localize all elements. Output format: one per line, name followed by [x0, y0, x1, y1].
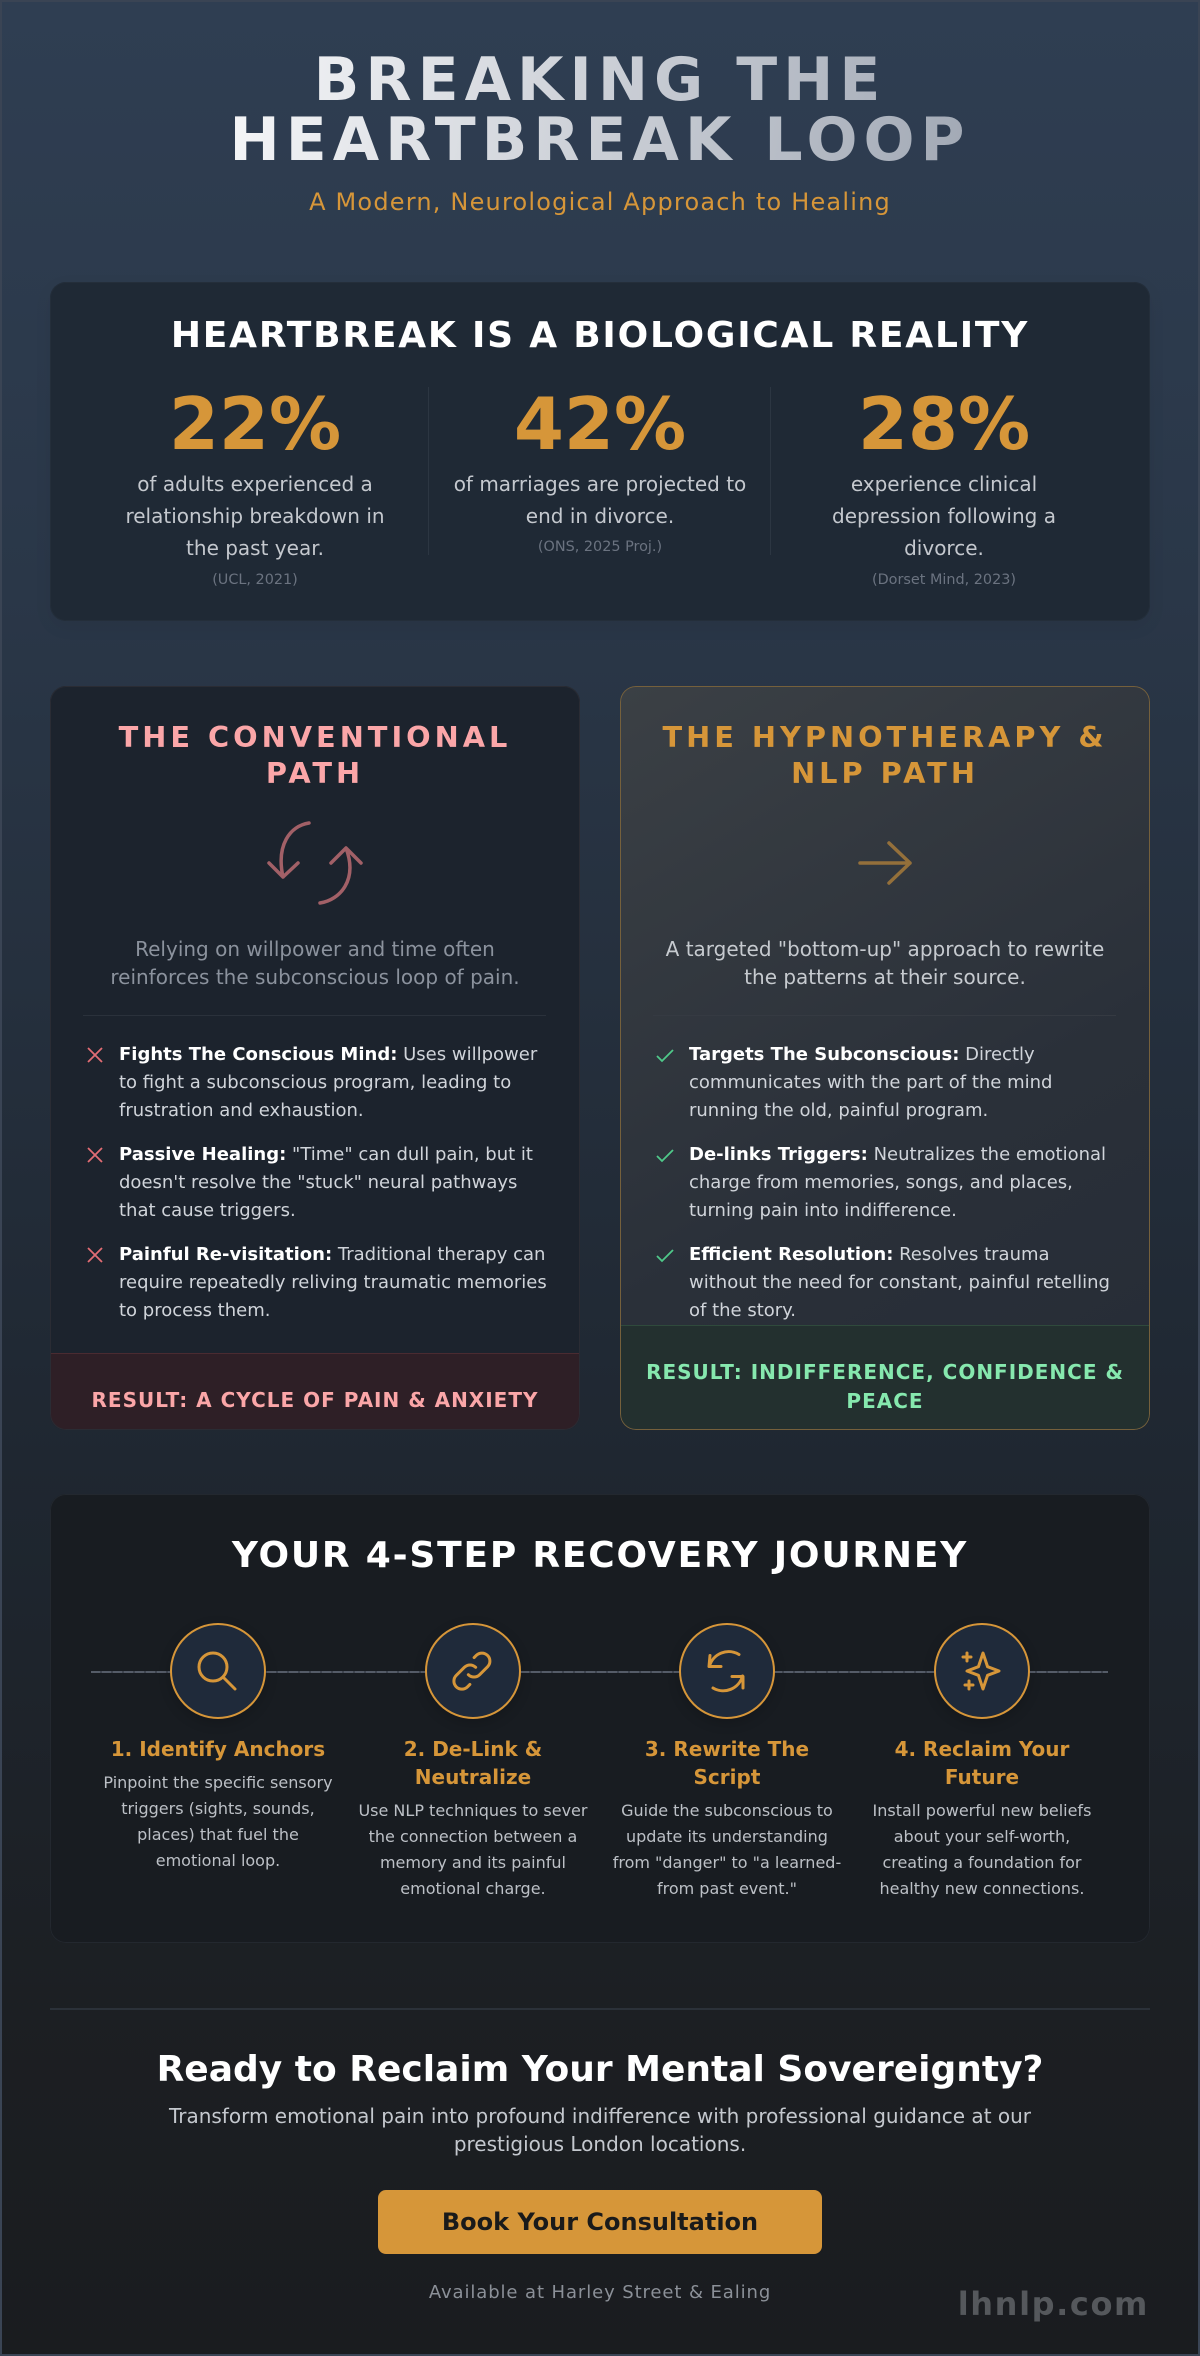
button: book consultation: [378, 2190, 822, 2254]
icon: sparkles: [934, 1623, 1030, 1719]
stat: 42%: 42%: [514, 382, 686, 466]
stat: 22%: relationship breakdown in: [125, 504, 385, 528]
list item: de-links triggers: charge from memories, songs, and places,: [689, 1172, 1073, 1192]
description: conventional: [110, 937, 520, 989]
step text 2: [358, 1801, 588, 1898]
step title 4: 4. Reclaim Your: [895, 1737, 1069, 1761]
list item: targets subconscious: [689, 1044, 1052, 1120]
list item: painful re-visitation: [119, 1244, 547, 1320]
step text 4: Install powerful new beliefs: [873, 1801, 1091, 1820]
heading: conventional path: [118, 720, 511, 790]
stat: 28%: (Dorset Mind, 2023): [872, 572, 1016, 588]
step text 3: update its understanding: [626, 1827, 828, 1846]
step text 3: [613, 1801, 841, 1898]
heading: hypnotherapy path: THE HYPNOTHERAPY &: [662, 720, 1108, 754]
title: [0, 50, 1200, 170]
title: HEARTBREAK LOOP: [230, 105, 970, 175]
step text 4: healthy new connections.: [880, 1879, 1084, 1898]
stat: 22%: [125, 382, 385, 588]
step title 2: [404, 1737, 542, 1789]
list item: efficient resolution: of the story.: [689, 1300, 796, 1320]
stat: 28%: 28%: [858, 382, 1030, 466]
stat: 42%: [454, 382, 746, 555]
list item: passive healing: doesn't resolve the "stuck" neural pathways: [119, 1172, 517, 1192]
stat: 22%: of adults experienced a: [137, 472, 373, 496]
list item: de-links triggers: turning pain into indifference.: [689, 1200, 957, 1220]
icon: chain link: [425, 1623, 521, 1719]
stat: 28%: experience clinical: [851, 472, 1037, 496]
step text 2: Use NLP techniques to sever: [358, 1801, 587, 1820]
stat: 22%: 22%: [169, 382, 341, 466]
result: indifference, confidence, peace: [620, 1325, 1150, 1430]
list item: painful re-visitation: to process them.: [119, 1300, 270, 1320]
step title 4: Future: [945, 1765, 1019, 1789]
heading: hypnotherapy path: NLP PATH: [791, 756, 979, 790]
icon: cycle arrows: [267, 821, 363, 905]
description: conventional: Relying on willpower and time often: [135, 937, 495, 961]
step text 2: memory and its painful: [380, 1853, 566, 1872]
list item: passive healing: [119, 1144, 533, 1220]
step text 4: about your self-worth,: [894, 1827, 1070, 1846]
step title 3: 3. Rewrite The: [645, 1737, 809, 1761]
stat: 28%: depression following a: [832, 504, 1056, 528]
step text 4: [873, 1801, 1091, 1898]
step text 3: from past event.": [657, 1879, 797, 1898]
step title 2: Neutralize: [415, 1765, 531, 1789]
list item: efficient resolution: without the need for constant, painful retelling: [689, 1272, 1110, 1292]
divider 1: [428, 387, 429, 555]
description: conventional: reinforces the subconscious loop of pain.: [110, 965, 520, 989]
icon: check 2: [656, 1149, 674, 1162]
step title 3: Script: [694, 1765, 760, 1789]
heading: recovery journey: YOUR 4-STEP RECOVERY JOURNEY: [232, 1535, 968, 1576]
step text 2: the connection between a: [369, 1827, 577, 1846]
step 2: [358, 1623, 588, 1898]
list item: efficient resolution: [689, 1244, 1110, 1320]
icon: cross 2: [87, 1147, 103, 1163]
step title 3: [645, 1737, 809, 1789]
icon: refresh arrows: [679, 1623, 775, 1719]
connecting line: [91, 1671, 1108, 1673]
call to action text: Transform emotional pain into profound indifference with professional guidance at our: [169, 2104, 1031, 2128]
list item: targets subconscious: communicates with the part of the mind: [689, 1072, 1052, 1092]
subtitle: A Modern, Neurological Approach to Healing: [309, 188, 891, 216]
step title 2: 2. De-Link &: [404, 1737, 542, 1761]
step 1: [103, 1623, 333, 1870]
list item: painful re-visitation: require repeatedly reliving traumatic memories: [119, 1272, 547, 1292]
icon: cross 3: [87, 1247, 103, 1263]
result: indifference, confidence, peace: RESULT: INDIFFERENCE, CONFIDENCE &: [646, 1360, 1124, 1384]
step text 2: emotional charge.: [400, 1879, 546, 1898]
panel: biological reality stats: [50, 282, 1150, 621]
step 3: [613, 1623, 841, 1898]
step text 1: Pinpoint the specific sensory: [103, 1773, 333, 1792]
stat: 42%: of marriages are projected to: [454, 472, 746, 496]
step title 4: [895, 1737, 1070, 1789]
list item: passive healing: Passive Healing: "Time" can dull pain, but it: [119, 1144, 533, 1164]
list item: de-links triggers: [689, 1144, 1106, 1220]
panel: conventional path: [50, 686, 580, 1430]
call to action heading: Ready to Reclaim Your Mental Sovereignty?: [157, 2049, 1043, 2090]
panel: hypnotherapy and NLP path: [620, 686, 1150, 1430]
step 4: [873, 1623, 1091, 1898]
description: hypnotherapy: A targeted "bottom-up" approach to rewrite: [666, 937, 1104, 961]
step text 1: [103, 1773, 333, 1870]
icon: cross 1: [87, 1047, 103, 1063]
heading: biological reality: HEARTBREAK IS A BIOLOGICAL REALITY: [171, 315, 1029, 356]
step text 4: creating a foundation for: [882, 1853, 1082, 1872]
description: hypnotherapy: the patterns at their source.: [744, 965, 1026, 989]
stat: 28%: divorce.: [904, 536, 984, 560]
stat: 22%: (UCL, 2021): [212, 572, 298, 588]
call to action text: prestigious London locations.: [454, 2132, 746, 2156]
icon: magnifying glass: [170, 1623, 266, 1719]
list item: fights conscious mind: Fights The Conscious Mind: Uses willpower: [119, 1044, 537, 1064]
list item: efficient resolution: Efficient Resolution: Resolves trauma: [689, 1244, 1050, 1264]
list item: de-links triggers: De-links Triggers: Neutralizes the emotional: [689, 1144, 1106, 1164]
result: cycle of pain: RESULT: A CYCLE OF PAIN & ANXIETY: [92, 1388, 538, 1412]
divider 2: [770, 387, 771, 555]
icon: check 3: [656, 1249, 674, 1262]
list item: targets subconscious: Targets The Subconscious: Directly: [689, 1044, 1035, 1064]
description: hypnotherapy: [666, 937, 1104, 989]
heading: hypnotherapy path: [662, 720, 1108, 790]
title: BREAKING THE: [314, 45, 886, 115]
list item: fights conscious mind: to fight a subconscious program, leading to: [119, 1072, 511, 1092]
list item: painful re-visitation: Painful Re-visitation: Traditional therapy can: [119, 1244, 545, 1264]
result: indifference, confidence, peace: PEACE: [846, 1388, 924, 1412]
heading: conventional path: THE CONVENTIONAL: [119, 720, 511, 754]
step text 3: from "danger" to "a learned-: [613, 1853, 841, 1872]
list item: fights conscious mind: frustration and exhaustion.: [119, 1100, 364, 1120]
watermark: lhnlp.com: [958, 2285, 1149, 2323]
stat: 42%: (ONS, 2025 Proj.): [538, 539, 662, 555]
list item: fights conscious mind: [119, 1044, 538, 1120]
button: book consultation: Book Your Consultation: [442, 2208, 758, 2236]
stat: 22%: the past year.: [186, 536, 324, 560]
step title 1: 1. Identify Anchors: [111, 1737, 325, 1761]
icon: check 1: [656, 1049, 674, 1062]
step text 1: emotional loop.: [156, 1851, 280, 1870]
icon: right arrow: [858, 841, 912, 885]
list item: targets subconscious: running the old, painful program.: [689, 1100, 988, 1120]
step text 3: Guide the subconscious to: [621, 1801, 833, 1820]
result: cycle of pain: [50, 1353, 580, 1430]
call to action text: [168, 2104, 1031, 2156]
step text 1: triggers (sights, sounds,: [121, 1799, 315, 1818]
stat: 42%: end in divorce.: [526, 504, 674, 528]
panel: 4-step recovery journey: [50, 1494, 1150, 1943]
locations note: Available at Harley Street & Ealing: [429, 2282, 771, 2303]
list item: passive healing: that cause triggers.: [119, 1200, 296, 1220]
step text 1: places) that fuel the: [137, 1825, 299, 1844]
heading: conventional path: PATH: [266, 756, 364, 790]
stat: 28%: [832, 382, 1056, 588]
